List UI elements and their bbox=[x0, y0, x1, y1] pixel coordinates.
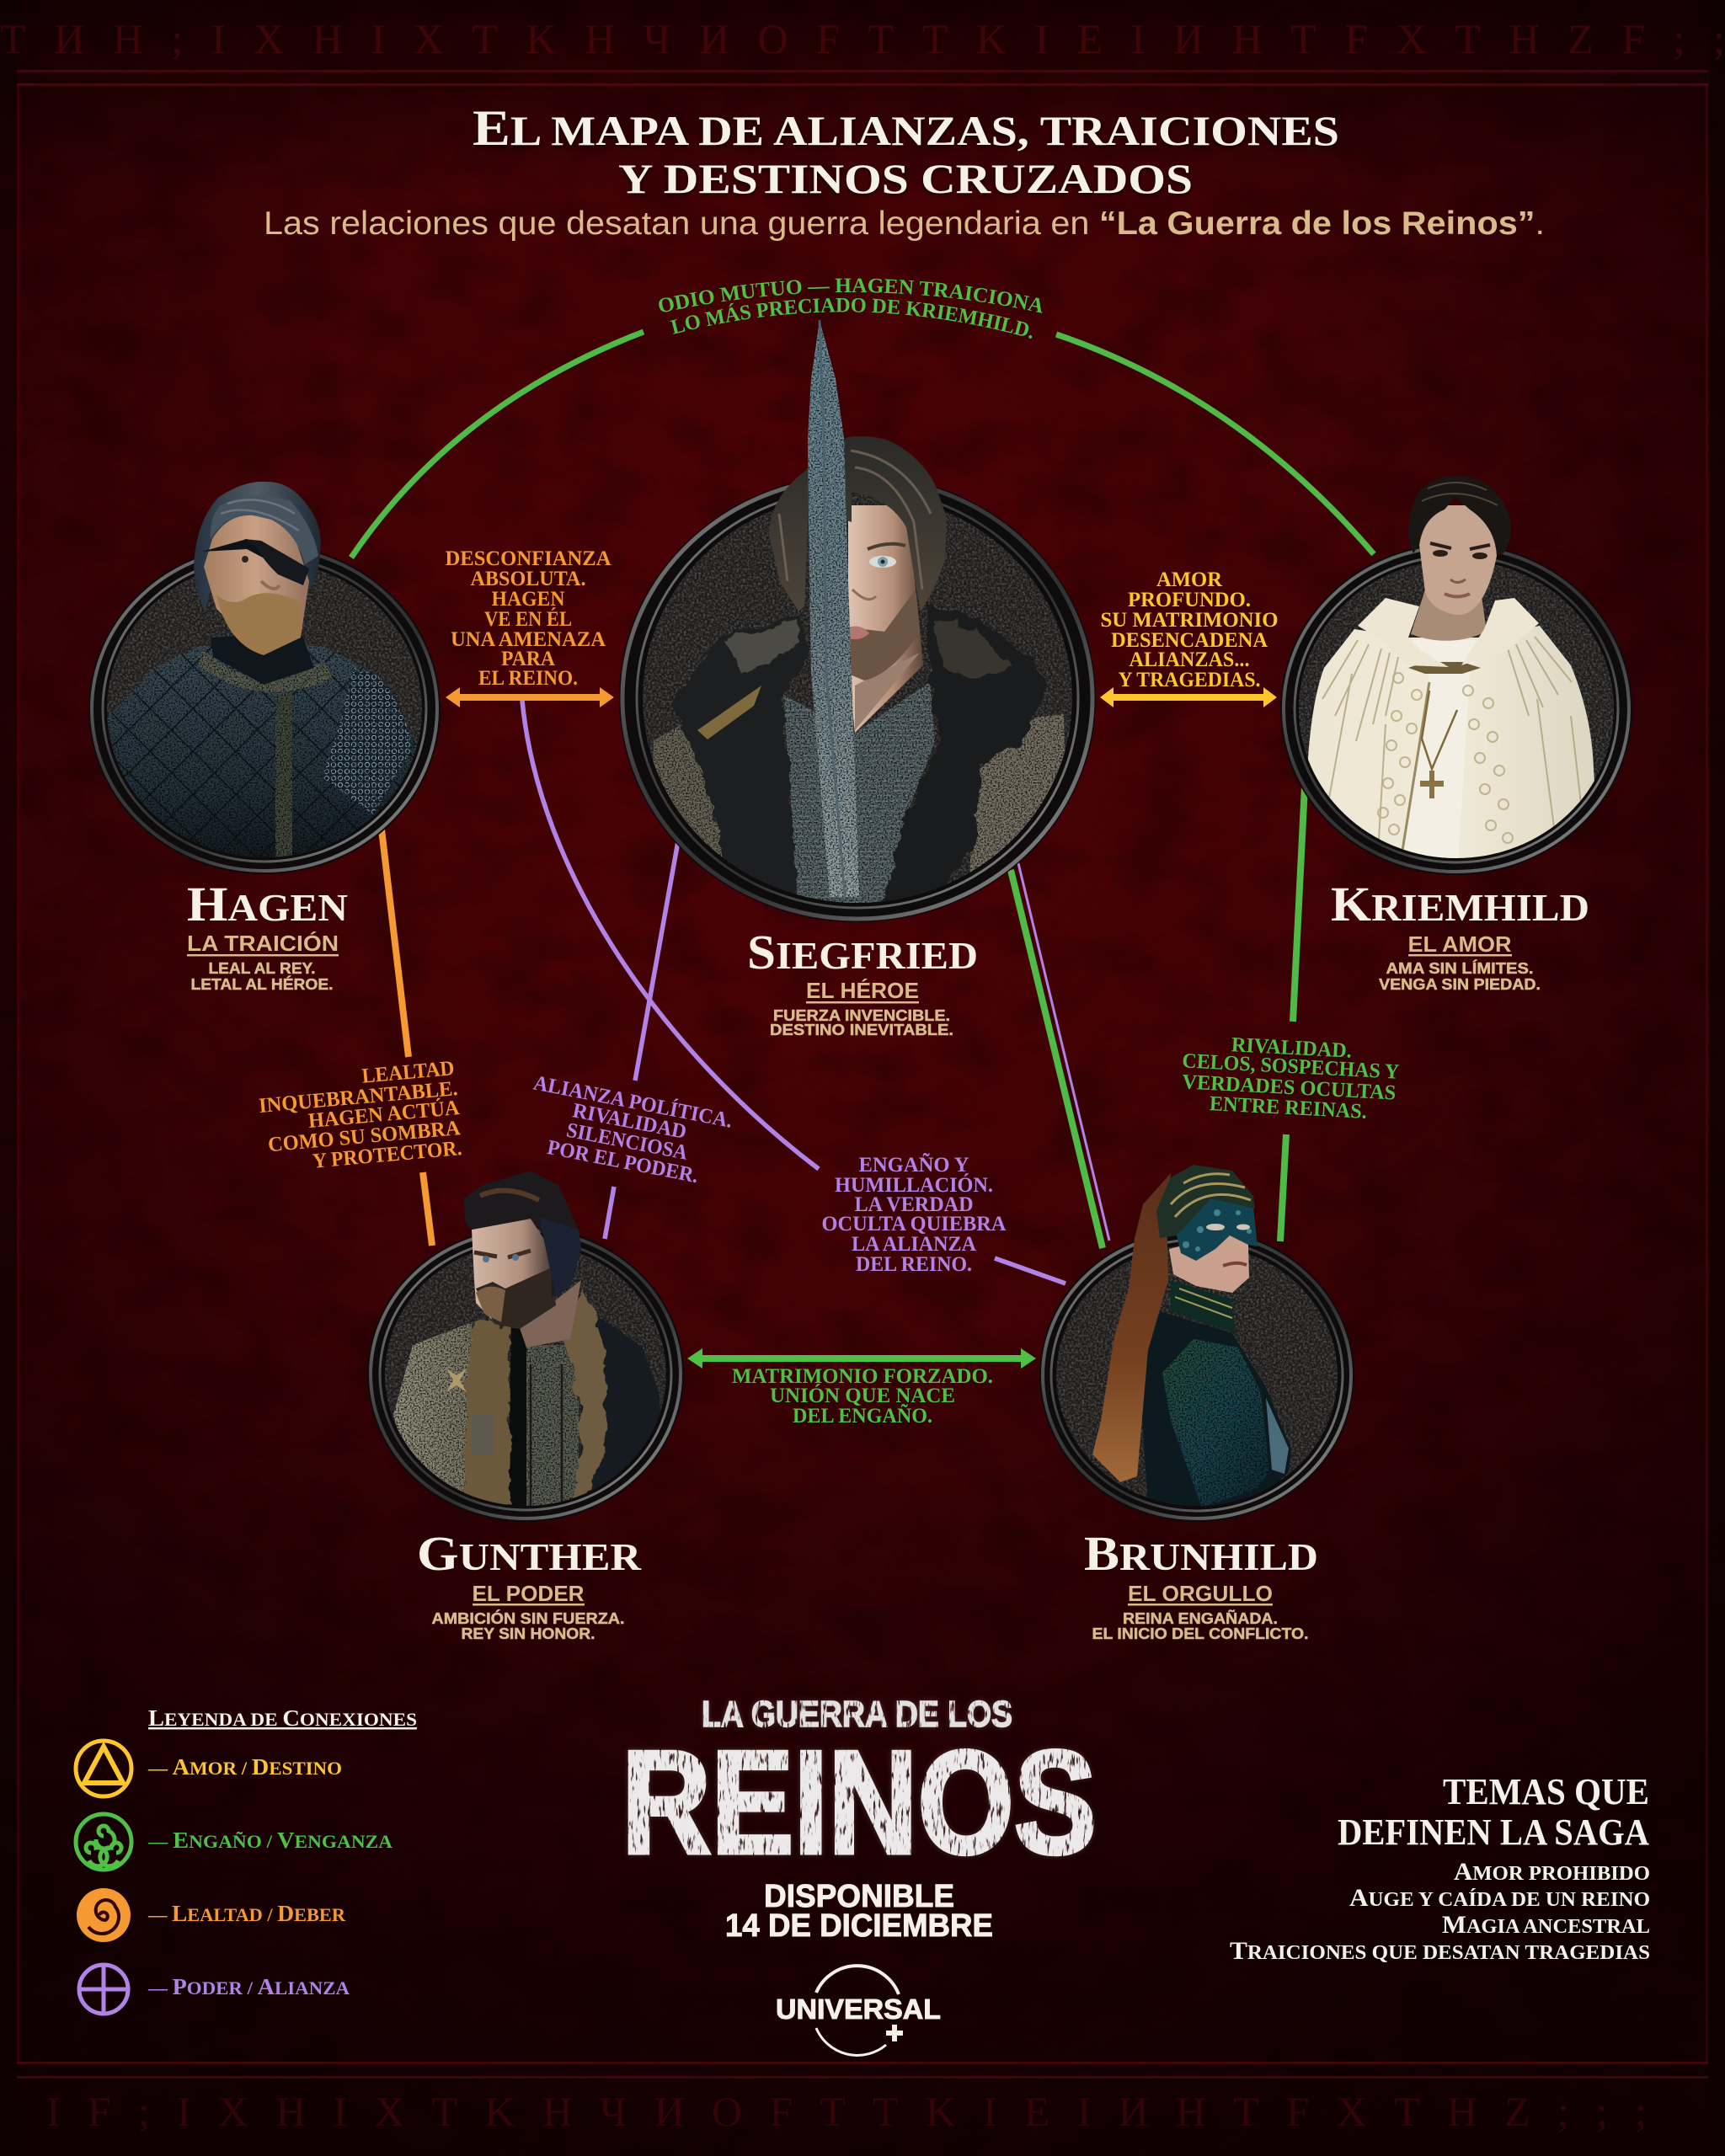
label: Hagen and Brunhild deception: LA ALIANZA bbox=[852, 1233, 976, 1256]
caption: Gunther: REY SIN HONOR. bbox=[462, 1625, 595, 1642]
caption: Brunhild: REINA ENGAÑADA. bbox=[1123, 1609, 1278, 1627]
label: Gunther and Brunhild marriage bbox=[732, 1365, 993, 1428]
label: Kriemhild and Brunhild rivalry: CELOS, SOSPECHAS Y bbox=[1182, 1049, 1400, 1084]
top rune border: TИH;IXHIXTKHЧИOFTTKIEIИHTFXTHZF;; bbox=[0, 15, 1725, 62]
label: Gunther and Brunhild marriage: UNIÓN QUE NACE bbox=[770, 1384, 955, 1407]
label: Hagen and Siegfried distrust: HAGEN bbox=[492, 588, 564, 611]
caption: Brunhild: BRUNHILD bbox=[1084, 1526, 1318, 1581]
Universal+ logo bbox=[776, 1966, 941, 2055]
label: Hagen and Siegfried distrust: UNA AMENAZA bbox=[451, 628, 606, 651]
legend heading: LEYENDA DE CONEXIONES bbox=[148, 1705, 417, 1731]
label: Siegfried and Gunther alliance: POR EL PODER. bbox=[546, 1136, 700, 1187]
caption: Hagen: LA TRAICIÓN bbox=[187, 931, 339, 956]
caption: Siegfried: EL HÉROE bbox=[806, 978, 919, 1003]
label: Hagen and Brunhild deception: OCULTA QUIEBRA bbox=[822, 1213, 1006, 1235]
caption: Hagen bbox=[187, 877, 348, 993]
connector: Hagen to Gunther (lealtad) bbox=[382, 830, 432, 1246]
caption: Brunhild: EL INICIO DEL CONFLICTO. bbox=[1092, 1625, 1309, 1642]
legend: poder: — PODER / ALIANZA bbox=[147, 1974, 350, 1999]
caption: Gunther: EL PODER bbox=[472, 1581, 585, 1606]
connector: Kriemhild to Brunhild (rivalidad) bbox=[1280, 787, 1305, 1241]
label: Kriemhild and Brunhild rivalry bbox=[1182, 1033, 1400, 1123]
connector: Hagen to Brunhild (humillacion) bbox=[522, 701, 1065, 1283]
label: Gunther and Brunhild marriage: DEL ENGAÑO. bbox=[793, 1404, 932, 1428]
label: Hagen and Brunhild deception bbox=[822, 1153, 1006, 1276]
label: Siegfried and Gunther alliance: ALIANZA POLÍTICA. bbox=[531, 1071, 734, 1133]
portrait: Kriemhild bbox=[1280, 476, 1632, 876]
themes heading bbox=[1338, 1771, 1649, 1853]
label: Hagen and Gunther loyalty: Y PROTECTOR. bbox=[312, 1137, 463, 1173]
label: Siegfried and Gunther alliance bbox=[531, 1071, 734, 1187]
series logo: LA GUERRA DE LOS bbox=[702, 1694, 1012, 1735]
portrait: Hagen bbox=[88, 482, 441, 876]
arrow: Hagen and Siegfried bbox=[446, 687, 614, 707]
top rune border bbox=[0, 15, 1725, 86]
label: Hagen and Gunther loyalty: COMO SU SOMBRA bbox=[267, 1117, 462, 1156]
caption: Brunhild: EL ORGULLO bbox=[1128, 1581, 1273, 1606]
connector: Hagen to Kriemhild (enganyo / odio) bbox=[351, 332, 1374, 558]
caption: Hagen: LEAL AL REY. bbox=[209, 960, 315, 977]
legend: engano bbox=[76, 1814, 393, 1870]
themes list: TRAICIONES QUE DESATAN TRAGEDIAS bbox=[1230, 1937, 1650, 1965]
caption: Kriemhild: KRIEMHILD bbox=[1331, 877, 1589, 931]
label: Hagen and Siegfried distrust: VE EN ÉL bbox=[484, 607, 572, 631]
release date: DISPONIBLE bbox=[764, 1879, 954, 1914]
bottom rune border: IF;IXHIXTKHЧИOFTTKIEIИHTFXTHZ;;; bbox=[46, 2088, 1647, 2135]
label: Hagen and Kriemhild curved hatred bbox=[659, 278, 1043, 339]
label: Kriemhild and Brunhild rivalry: VERDADES OCULTAS bbox=[1182, 1070, 1397, 1105]
portrait: Gunther bbox=[367, 1171, 684, 1522]
Universal+ logo: UNIVERSAL bbox=[776, 1993, 941, 2025]
caption: Siegfried: SIEGFRIED bbox=[747, 925, 978, 979]
legend: amor bbox=[76, 1741, 342, 1796]
caption: Siegfried bbox=[747, 925, 978, 1038]
themes list bbox=[1230, 1858, 1650, 1965]
themes list: AMOR PROHIBIDO bbox=[1454, 1858, 1650, 1886]
themes heading: DEFINEN LA SAGA bbox=[1338, 1812, 1649, 1853]
portrait: Brunhild bbox=[1039, 1165, 1354, 1522]
label: Hagen and Gunther loyalty: LEALTAD bbox=[361, 1057, 456, 1088]
portrait: Siegfried with sword bbox=[619, 320, 1096, 922]
title: EL MAPA DE ALIANZAS, TRAICIONES bbox=[473, 100, 1339, 156]
label: Siegfried and Kriemhild love bbox=[1100, 568, 1279, 691]
caption: Gunther: GUNTHER bbox=[417, 1526, 642, 1581]
label: Siegfried and Kriemhild love: PROFUNDO. bbox=[1128, 589, 1251, 611]
caption: Kriemhild bbox=[1331, 877, 1589, 993]
label: Siegfried and Kriemhild love: ALIANZAS... bbox=[1129, 648, 1250, 671]
label: Kriemhild and Brunhild rivalry: ENTRE REINAS. bbox=[1209, 1092, 1367, 1123]
caption: Siegfried: DESTINO INEVITABLE. bbox=[770, 1022, 953, 1038]
legend: lealtad: — LEALTAD / DEBER bbox=[147, 1901, 346, 1926]
subtitle: Las relaciones que desatan una guerra legendaria en “La Guerra de los Reinos” . bbox=[264, 205, 1545, 242]
label: Hagen and Brunhild deception: ENGAÑO Y bbox=[859, 1153, 969, 1177]
label: Siegfried and Kriemhild love: AMOR bbox=[1156, 568, 1223, 591]
caption: Brunhild bbox=[1084, 1526, 1318, 1642]
caption: Hagen: LETAL AL HÉROE. bbox=[190, 975, 334, 993]
caption: Gunther bbox=[417, 1526, 642, 1642]
label: Hagen and Gunther loyalty: HAGEN ACTÚA bbox=[307, 1096, 461, 1133]
arrow: Gunther and Brunhild bbox=[687, 1348, 1036, 1369]
series logo: REINOS bbox=[622, 1720, 1097, 1884]
legend: lealtad bbox=[77, 1888, 346, 1942]
legend: amor: — AMOR / DESTINO bbox=[147, 1754, 342, 1780]
label: Hagen and Siegfried distrust: DESCONFIANZA bbox=[445, 547, 611, 570]
caption: Kriemhild: EL AMOR bbox=[1408, 931, 1512, 957]
title bbox=[473, 100, 1339, 202]
release date: 14 DE DICIEMBRE bbox=[725, 1908, 993, 1944]
arrow: Siegfried and Kriemhild bbox=[1100, 687, 1277, 707]
label: Kriemhild and Brunhild rivalry: RIVALIDAD. bbox=[1231, 1033, 1353, 1063]
caption: Hagen: HAGEN bbox=[187, 877, 348, 931]
label: Hagen and Siegfried distrust: EL REINO. bbox=[478, 667, 578, 690]
label: Hagen and Brunhild deception: DEL REINO. bbox=[856, 1253, 972, 1276]
label: Hagen and Kriemhild curved hatred: ODIO MUTUO — HAGEN TRAICIONA bbox=[659, 278, 1043, 313]
caption: Gunther: AMBICIÓN SIN FUERZA. bbox=[431, 1609, 625, 1627]
legend bbox=[76, 1705, 417, 2014]
themes list: MAGIA ANCESTRAL bbox=[1442, 1911, 1650, 1939]
title: Y DESTINOS CRUZADOS bbox=[618, 155, 1193, 202]
themes list: AUGE Y CAÍDA DE UN REINO bbox=[1349, 1884, 1650, 1912]
themes heading: TEMAS QUE bbox=[1443, 1771, 1649, 1812]
label: Hagen and Siegfried distrust bbox=[445, 547, 611, 690]
label: Hagen and Kriemhild curved hatred: LO MÁS PRECIADO DE KRIEMHILD. bbox=[670, 298, 1033, 339]
label: Hagen and Siegfried distrust: ABSOLUTA. bbox=[470, 568, 586, 590]
release date bbox=[725, 1879, 993, 1944]
label: Hagen and Brunhild deception: HUMILLACIÓN. bbox=[835, 1173, 993, 1197]
connector: Siegfried to Gunther (alianza) bbox=[605, 841, 678, 1239]
themes panel bbox=[1230, 1771, 1650, 1965]
caption: Kriemhild: AMA SIN LÍMITES. bbox=[1386, 959, 1533, 977]
label: Siegfried and Gunther alliance: RIVALIDAD bbox=[571, 1099, 688, 1144]
label: Hagen and Brunhild deception: LA VERDAD bbox=[854, 1193, 974, 1216]
label: Siegfried and Kriemhild love: Y TRAGEDIAS. bbox=[1119, 669, 1260, 691]
label: Siegfried and Gunther alliance: SILENCIOSA bbox=[564, 1118, 690, 1165]
caption: Kriemhild: VENGA SIN PIEDAD. bbox=[1379, 976, 1541, 993]
label: Siegfried and Kriemhild love: SU MATRIMONIO bbox=[1100, 609, 1279, 632]
legend: poder bbox=[79, 1965, 350, 2014]
connector: Siegfried to Brunhild bbox=[1011, 863, 1109, 1248]
label: Hagen and Gunther loyalty: INQUEBRANTABLE. bbox=[258, 1077, 459, 1118]
bottom rune border bbox=[17, 2062, 1708, 2135]
caption: Siegfried: FUERZA INVENCIBLE. bbox=[773, 1007, 950, 1024]
label: Gunther and Brunhild marriage: MATRIMONIO FORZADO. bbox=[732, 1365, 993, 1388]
label: Siegfried and Kriemhild love: DESENCADENA bbox=[1111, 629, 1268, 652]
legend: engano: — ENGAÑO / VENGANZA bbox=[147, 1828, 393, 1853]
label: Hagen and Siegfried distrust: PARA bbox=[501, 648, 555, 670]
label: Hagen and Gunther loyalty bbox=[258, 1057, 463, 1173]
